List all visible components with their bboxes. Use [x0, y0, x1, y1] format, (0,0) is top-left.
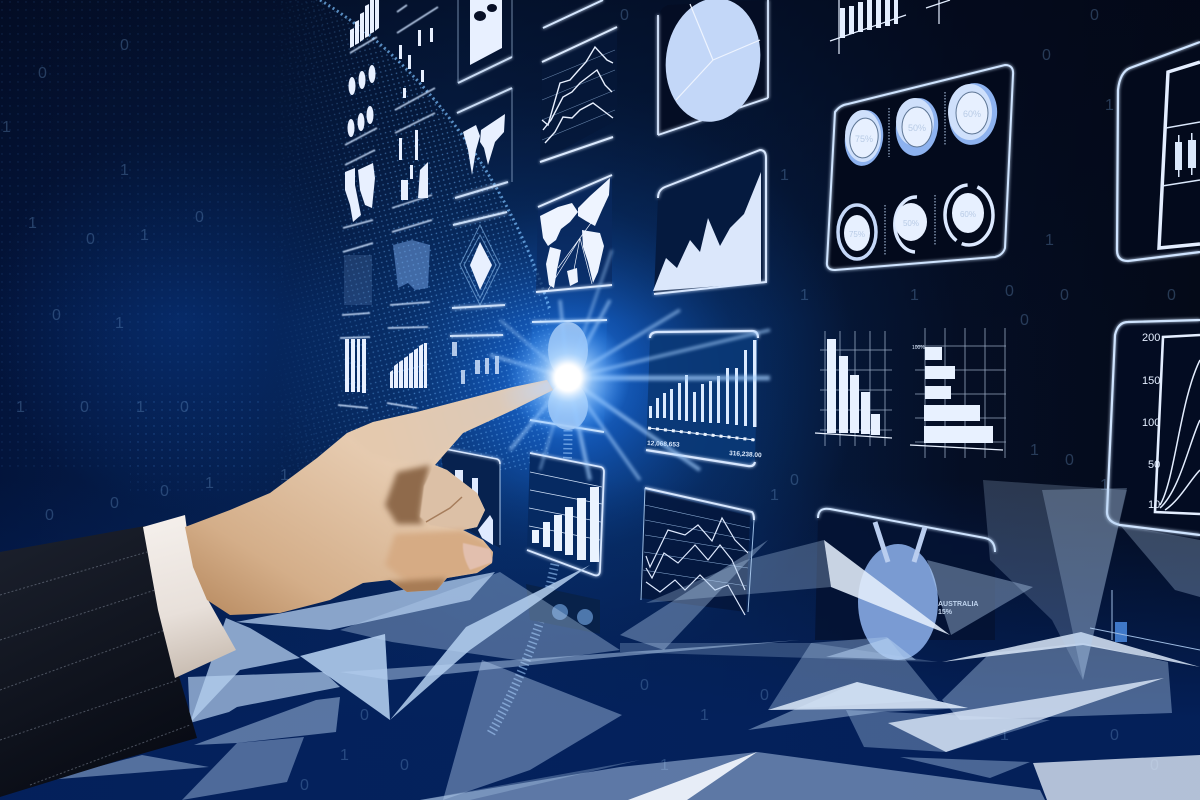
- binary digits: 0: [180, 399, 189, 416]
- binary digits: 0: [160, 483, 169, 500]
- binary digits: 0: [760, 687, 769, 704]
- binary digits: 1: [700, 707, 709, 724]
- dashboard column 3: maps and charts: [450, 0, 512, 384]
- suit sleeve: [0, 526, 197, 797]
- chart: mid bar chart: [815, 331, 892, 446]
- binary digits: 0: [86, 231, 95, 248]
- dashboard column 5: panels: [640, 0, 770, 615]
- chart: mid horizontal bars: 100%: [912, 345, 925, 351]
- binary digits: 1: [140, 227, 149, 244]
- binary digits: 1: [16, 399, 25, 416]
- dashboard column 4: line chart, map: [536, 0, 617, 292]
- gauge ring 75: [838, 205, 876, 259]
- binary digits: 1: [1000, 727, 1009, 744]
- hand: [180, 375, 560, 620]
- gauge ring 60: 60%: [960, 210, 976, 219]
- binary digits: 1: [800, 287, 809, 304]
- panel: lower map dial: AUSTRALIA: [938, 601, 978, 608]
- binary digits: 0: [1145, 192, 1154, 209]
- binary digits: 0: [400, 757, 409, 774]
- binary digits: 0: [120, 37, 129, 54]
- binary digits: 0: [640, 677, 649, 694]
- binary digits: 1: [1030, 442, 1039, 459]
- binary digits: 1: [205, 475, 214, 492]
- panel: line chart lower: [640, 488, 754, 615]
- binary digits: 1: [910, 287, 919, 304]
- triangles bottom: [47, 480, 1200, 800]
- gauge 50: [892, 95, 942, 159]
- panel: world map hub: [536, 175, 612, 292]
- chart: top small bars: [830, 0, 950, 54]
- globe wireframe: [0, 0, 568, 735]
- panel: people chart: [440, 448, 500, 548]
- binary digits: 0: [1090, 7, 1099, 24]
- binary digits: 1: [136, 399, 145, 416]
- panel: right line curve chart: 150: [1142, 375, 1160, 387]
- gauge ring 60: [945, 185, 993, 245]
- binary digits: 0: [52, 307, 61, 324]
- panel: pie chart: [658, 0, 770, 136]
- panel: bar chart touched: [646, 331, 762, 466]
- binary digits: 1: [660, 757, 669, 774]
- chart: mid horizontal bars: [910, 328, 1006, 458]
- binary digits: 1: [120, 162, 129, 179]
- shirt cuff: [143, 515, 236, 678]
- panel: lower map dial: 15%: [938, 609, 953, 616]
- panel: round icons: [526, 584, 600, 634]
- binary digits: 0: [1020, 312, 1029, 329]
- panel: right line curve chart: 10: [1148, 499, 1160, 511]
- panel: bar chart touched: 316,238.00: [729, 450, 762, 459]
- gauge ring 50: [895, 197, 927, 252]
- light flare: [490, 250, 770, 480]
- gauge 60: [945, 80, 1001, 148]
- panel: right line curve chart: 50: [1148, 459, 1160, 471]
- panel: right line curve chart: [1107, 320, 1200, 535]
- binary digits: 0: [38, 65, 47, 82]
- binary digits: 0: [968, 102, 977, 119]
- binary digits: 0: [45, 507, 54, 524]
- panel: right candlestick: [1117, 42, 1200, 261]
- gauge 60: 60%: [963, 109, 981, 119]
- binary digits: 0: [1110, 727, 1119, 744]
- panel: bar chart touched: 12,068,653: [647, 440, 680, 449]
- binary digits: 1: [280, 467, 289, 484]
- lower column 3 and 4 panels: [440, 448, 604, 634]
- binary digits: 0: [1167, 287, 1176, 304]
- panel: right line curve chart: 200: [1142, 332, 1160, 344]
- binary digits: 0: [300, 777, 309, 794]
- binary digits: 1: [340, 747, 349, 764]
- panel: lower right small chart: [1090, 590, 1200, 650]
- binary digits: 1: [1105, 97, 1114, 114]
- binary digits: 1: [1100, 477, 1109, 494]
- panel: area chart: [653, 150, 766, 294]
- binary digits: 0: [790, 472, 799, 489]
- binary digits: 0: [1150, 757, 1159, 774]
- panel: line chart: [540, 27, 617, 162]
- panel: gauges: [827, 65, 1013, 270]
- panel: spiral bar chart: [527, 453, 604, 577]
- binary digits: 1: [2, 119, 11, 136]
- binary digits: 1: [1045, 232, 1054, 249]
- binary digits: 0: [1005, 283, 1014, 300]
- binary digits: 0: [1042, 47, 1051, 64]
- binary digits: 1: [28, 215, 37, 232]
- touched panel with pie: [530, 320, 607, 432]
- binary digits: 0: [360, 707, 369, 724]
- panel: right line curve chart: 100: [1142, 417, 1160, 429]
- binary digits: 0: [195, 209, 204, 226]
- binary digits: 0: [110, 495, 119, 512]
- binary digits: 1: [780, 167, 789, 184]
- gauge 75: 75%: [855, 134, 873, 144]
- gauge 50: 50%: [908, 123, 926, 133]
- binary digits: 1: [770, 487, 779, 504]
- binary digits: 1: [115, 315, 124, 332]
- dashboard column 2: small panels: [387, 5, 438, 408]
- binary digits: 0: [80, 399, 89, 416]
- gauge ring 75: 75%: [849, 230, 865, 239]
- panel: lower map dial: [815, 509, 995, 660]
- binary digits: 0: [1060, 287, 1069, 304]
- gauge 75: [841, 108, 887, 168]
- gauge ring 50: 50%: [903, 219, 919, 228]
- binary digits: 0: [620, 7, 629, 24]
- binary digits: 0: [1065, 452, 1074, 469]
- dashboard column 1: small panels: [338, 0, 379, 408]
